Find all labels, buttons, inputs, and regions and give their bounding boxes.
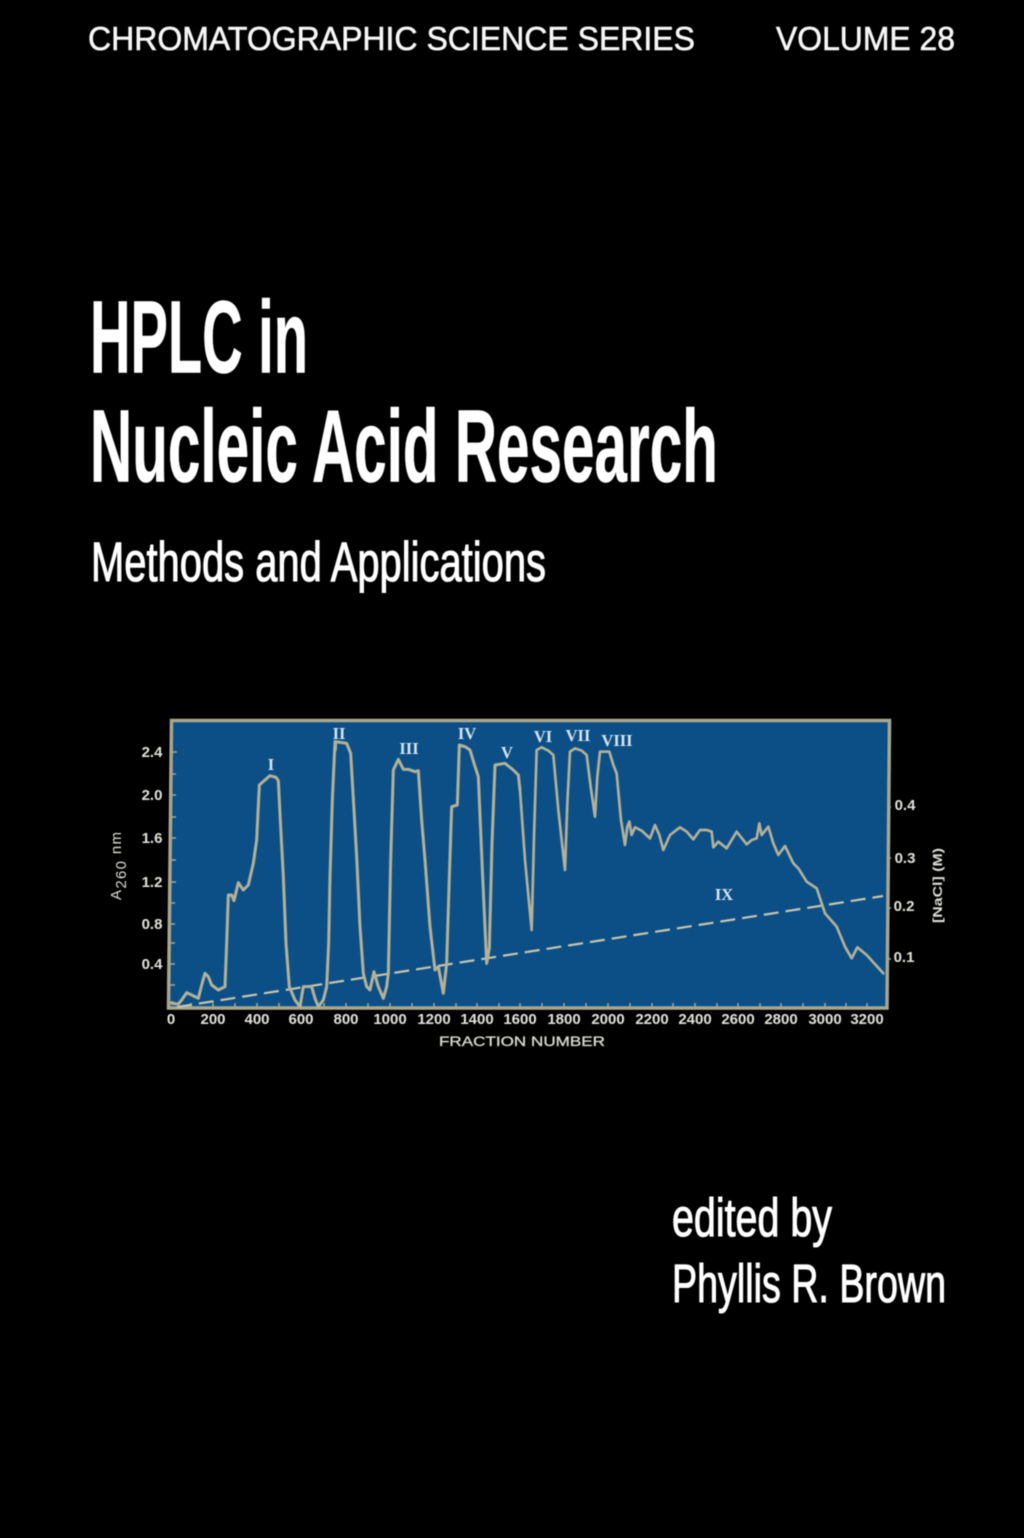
left axis title: A (108, 890, 125, 900)
peak labels: III (399, 739, 419, 758)
bottom axis labels: 1600 (503, 1011, 537, 1028)
bottom axis labels: 200 (200, 1011, 226, 1028)
bottom axis title: FRACTION NUMBER (439, 1033, 605, 1049)
subtitle: Methods and Applications (91, 530, 546, 593)
bottom axis labels: 2200 (635, 1011, 669, 1028)
bottom axis labels: 1400 (460, 1011, 494, 1028)
left axis labels: 0.8 (142, 916, 162, 933)
peak labels (268, 724, 733, 904)
left axis title: 260 (113, 861, 130, 889)
bottom axis labels: 2800 (764, 1011, 798, 1028)
chart plot frame (168, 720, 890, 1008)
right axis labels: 0.1 (894, 949, 914, 966)
left axis labels: 2.0 (142, 787, 162, 804)
left axis title: nm (108, 832, 125, 860)
bottom axis labels: 1200 (417, 1011, 451, 1028)
bottom axis labels: 400 (244, 1011, 270, 1028)
bottom axis labels: 800 (333, 1011, 359, 1028)
bottom axis labels: 3200 (850, 1011, 884, 1028)
peak labels: VIII (601, 731, 633, 750)
absorbance trace left part (172, 742, 520, 1007)
left axis labels: 0.4 (142, 956, 163, 973)
title: HPLC in (90, 280, 308, 394)
peak labels: I (268, 755, 274, 774)
peak labels: IX (715, 885, 733, 904)
left axis labels: 1.6 (142, 830, 162, 847)
bottom axis labels: 2400 (678, 1011, 712, 1028)
left axis labels: 2.4 (142, 744, 163, 761)
chromatogram chart (108, 720, 945, 1049)
left axis labels: 1.2 (142, 874, 162, 891)
bottom axis labels (167, 1011, 884, 1028)
absorbance trace right part (520, 747, 883, 973)
volume number: VOLUME 28 (776, 20, 955, 57)
right axis labels (894, 797, 916, 966)
peak labels: IV (458, 724, 476, 743)
peak labels: II (333, 724, 345, 743)
bottom axis labels: 3000 (808, 1011, 842, 1028)
peak labels: VI (534, 727, 552, 746)
right axis title: [NaCl] (M) (930, 848, 945, 923)
left axis labels (142, 744, 163, 973)
peak labels: VII (566, 726, 590, 745)
bottom axis labels: 0 (167, 1011, 175, 1028)
title (90, 280, 718, 504)
editor credit: edited by (672, 1188, 832, 1248)
bottom axis labels: 600 (288, 1011, 314, 1028)
right axis labels: 0.4 (895, 797, 916, 814)
bottom axis labels: 2000 (591, 1011, 625, 1028)
sodium chloride gradient dashed line (177, 896, 883, 1007)
right axis labels: 0.2 (894, 898, 914, 915)
bottom axis labels: 1800 (547, 1011, 581, 1028)
peak labels: V (501, 743, 513, 762)
editor credit (672, 1188, 946, 1314)
bottom axis labels: 2600 (721, 1011, 755, 1028)
bottom axis labels: 1000 (373, 1011, 407, 1028)
right axis labels: 0.3 (895, 850, 915, 867)
series name: CHROMATOGRAPHIC SCIENCE SERIES (88, 20, 695, 57)
